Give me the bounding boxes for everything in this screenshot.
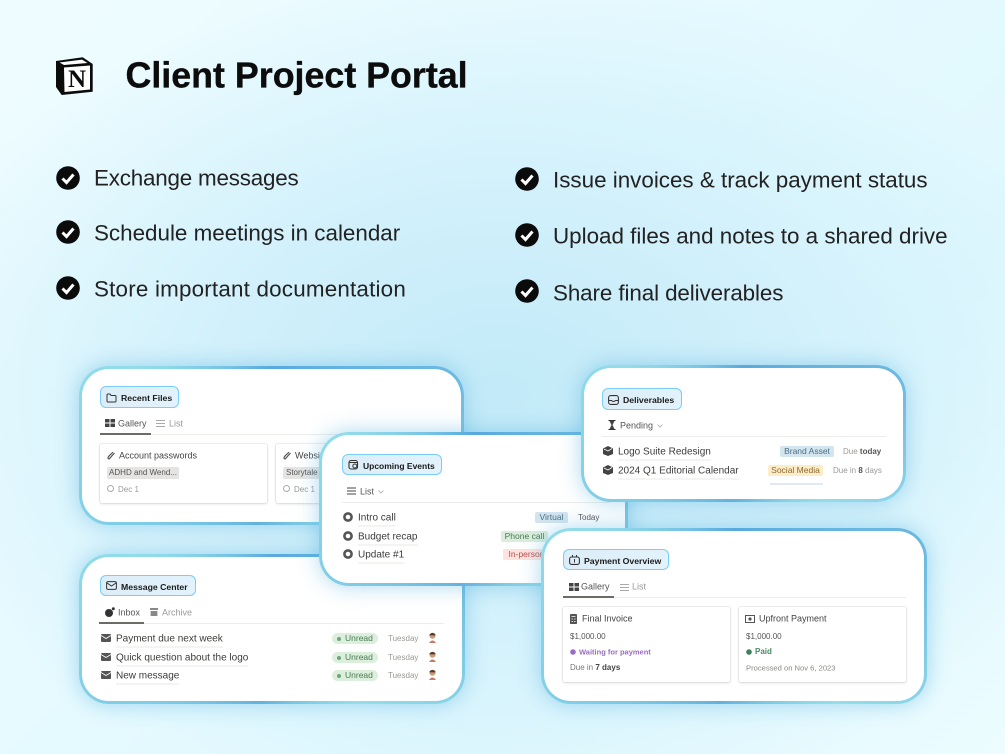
row: update 1: Update #1 (358, 550, 404, 560)
heading: payment overview (563, 549, 669, 570)
row: budget recap: Budget recap (358, 532, 418, 542)
panel: upcoming events (319, 432, 628, 586)
panel: payment overview (541, 528, 927, 704)
feature: store documentation: Store important documentation (94, 277, 406, 302)
icon: list view (347, 488, 356, 494)
panel: recent files (79, 366, 464, 525)
card: final invoice: Final Invoice (582, 614, 633, 624)
row: new message: Unread (345, 670, 373, 680)
row: payment due (101, 632, 436, 648)
row: new message: New message (116, 670, 179, 682)
card: website partial: Website (295, 451, 327, 461)
icon: gallery tab (569, 583, 579, 591)
card: account passwords (100, 444, 267, 503)
heading: recent files: Recent Files (121, 392, 172, 402)
title: Client Project Portal (126, 56, 468, 96)
tab: archive: Archive (162, 608, 192, 618)
icon: check upload files (515, 223, 539, 247)
icon: check store documentation (56, 276, 80, 300)
card: website partial (276, 444, 443, 503)
row: new message: Tuesday (388, 671, 418, 680)
row: quick question: Tuesday (388, 653, 418, 662)
panel: message center (79, 554, 465, 704)
card: final invoice: $1,000.00 (570, 632, 606, 641)
heading: upcoming events (342, 454, 442, 475)
card: account passwords: Account passwords (119, 451, 197, 461)
icon: Notion logo (56, 57, 93, 95)
clipped next row tag (770, 483, 823, 485)
card: website partial: Dec 1 (294, 485, 315, 494)
row: budget recap (343, 531, 548, 546)
heading: recent files (100, 386, 179, 408)
row: quick question: Quick question about the logo (116, 652, 248, 664)
card: website partial: Storytale (286, 468, 318, 477)
icon: hourglass (608, 420, 616, 430)
tab: pending: Pending (620, 421, 653, 431)
heading: deliverables (602, 388, 682, 410)
card: upfront payment (739, 607, 906, 682)
icon: check exchange messages (56, 166, 80, 190)
icon: list tab (620, 584, 629, 591)
card: final invoice: Due in 7 days (570, 663, 620, 672)
row: intro call (343, 512, 600, 526)
feature: schedule meetings: Schedule meetings in calendar (94, 221, 400, 246)
icon: inbox tab (105, 607, 115, 617)
icon: check deliverables (515, 279, 539, 303)
card: account passwords: ADHD and Wend... (109, 468, 177, 477)
row: logo suite: Brand Asset (784, 446, 830, 456)
card: account passwords: Dec 1 (118, 485, 139, 494)
row: editorial calendar (603, 465, 882, 480)
row: intro call: Intro call (358, 512, 396, 524)
row: logo suite (603, 446, 882, 460)
card: upfront payment: Upfront Payment (759, 614, 827, 624)
icon: archive tab (150, 608, 158, 616)
icon: chevron (378, 490, 384, 494)
tab: inbox: Inbox (118, 608, 140, 618)
row: update 1 (343, 549, 544, 564)
row: editorial calendar: Social Media (771, 465, 820, 475)
row: logo suite: Due today (843, 447, 881, 456)
panel: deliverables (581, 365, 906, 502)
feature: exchange messages: Exchange messages (94, 166, 298, 191)
row: payment due: Unread (345, 633, 373, 643)
card: upfront payment: Paid (755, 647, 772, 656)
row: budget recap: Phone call (505, 531, 544, 541)
feature: invoices: Issue invoices & track payment status (553, 168, 928, 193)
feature: upload files: Upload files and notes to a shared drive (553, 224, 948, 249)
heading: upcoming events: Upcoming Events (363, 460, 435, 470)
card: final invoice (563, 607, 730, 682)
row: logo suite: Logo Suite Redesign (618, 446, 711, 458)
icon: list tab (156, 420, 165, 427)
tab: list: List (169, 419, 183, 429)
heading: deliverables: Deliverables (623, 394, 674, 404)
icon: check invoices (515, 167, 539, 191)
row: quick question: Unread (345, 652, 373, 662)
card: upfront payment: $1,000.00 (746, 632, 782, 641)
heading: payment overview: Payment Overview (584, 555, 661, 565)
row: editorial calendar: 2024 Q1 Editorial Calendar (618, 466, 739, 476)
row: new message (101, 670, 436, 684)
row: intro call: Virtual (540, 512, 563, 522)
feature: share deliverables: Share final deliverables (553, 281, 783, 306)
card: final invoice: Waiting for payment (579, 648, 651, 656)
card: upfront payment: Processed on Nov 6, 2023 (746, 663, 836, 672)
tab: gallery: Gallery (581, 582, 610, 592)
row: intro call: Today (578, 513, 599, 522)
tab: list: List (632, 582, 646, 592)
icon: Notion logo: N (68, 66, 86, 93)
row: payment due: Payment due next week (116, 634, 223, 644)
tab: gallery: Gallery (118, 419, 147, 429)
row: update 1: In-person (509, 549, 544, 559)
icon: chevron (657, 424, 663, 428)
tab: list view: List (360, 487, 374, 497)
row: payment due: Tuesday (388, 634, 418, 643)
icon: gallery tab (105, 419, 115, 427)
heading: message center (100, 575, 196, 596)
row: quick question (101, 652, 436, 666)
row: editorial calendar: Due in 8 days (833, 466, 882, 475)
icon: check schedule meetings (56, 220, 80, 244)
heading: message center: Message Center (121, 581, 188, 591)
